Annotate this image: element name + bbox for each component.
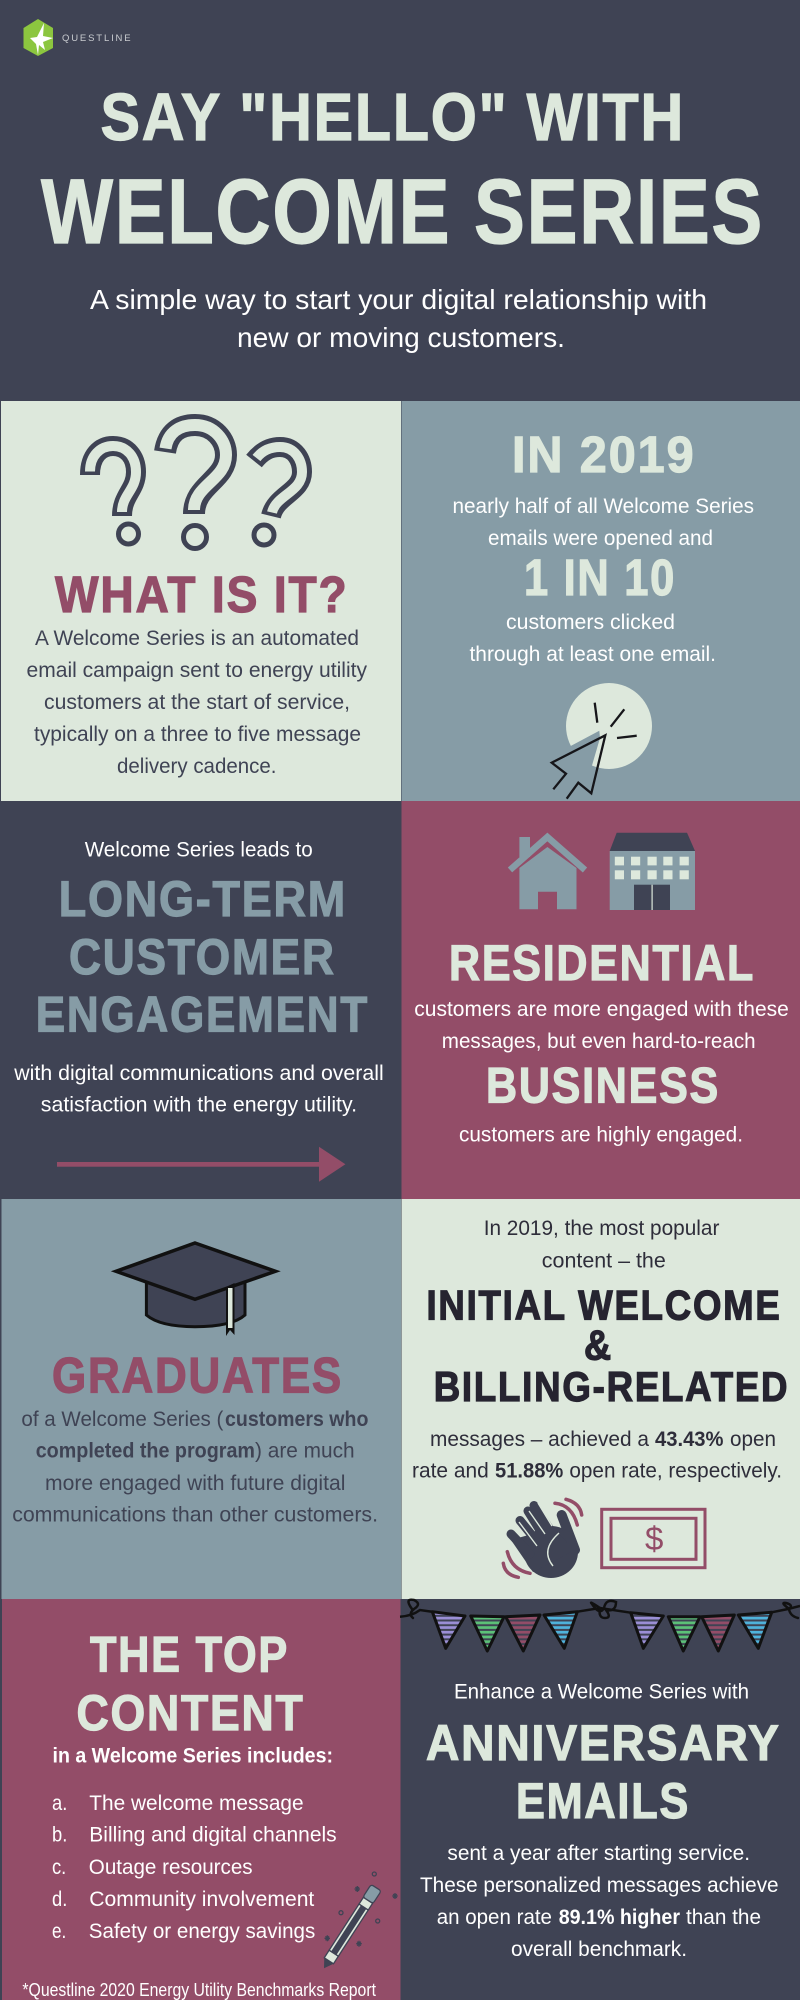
title bbox=[41, 80, 764, 263]
text: residential customers bbox=[414, 997, 789, 1053]
text: intro: Welcome Series leads to bbox=[85, 838, 313, 862]
subtitle: A simple way to start your digital relationship with bbox=[90, 284, 707, 315]
text: residential customers: customers are more engaged with these bbox=[414, 997, 789, 1021]
list: top content: d. bbox=[52, 1887, 67, 1911]
text: definition: typically on a three to five message bbox=[34, 722, 361, 746]
panel: the top content bbox=[2, 1599, 401, 2000]
text: list intro: in a Welcome Series includes: bbox=[52, 1744, 333, 1768]
heading: initial welcome and billing-related bbox=[426, 1281, 789, 1410]
heading: the top content bbox=[76, 1627, 305, 1741]
heading: long-term customer engagement: CUSTOMER bbox=[69, 929, 336, 985]
heading: anniversary emails bbox=[426, 1715, 781, 1829]
icon: question marks bbox=[90, 425, 302, 548]
text: digital communications: satisfaction with the energy utility. bbox=[41, 1093, 357, 1117]
icon: dollar bill: $ bbox=[645, 1520, 663, 1557]
text: popular content intro: In 2019, the most popular bbox=[484, 1216, 719, 1240]
logo: Questline: QUESTLINE bbox=[62, 33, 131, 44]
icon: dollar bill bbox=[602, 1509, 705, 1568]
heading: long-term customer engagement bbox=[36, 871, 369, 1043]
list: top content: b. bbox=[52, 1823, 67, 1847]
list: top content bbox=[52, 1791, 337, 1943]
text: half opened: nearly half of all Welcome Series bbox=[452, 494, 754, 518]
text: definition: email campaign sent to energy utility bbox=[26, 658, 367, 682]
text: graduates description: customers who bbox=[225, 1407, 368, 1431]
text: anniversary details: overall benchmark. bbox=[511, 1937, 687, 1961]
text: graduates description: more engaged with future digital bbox=[45, 1471, 345, 1495]
heading: long-term customer engagement: LONG-TERM bbox=[59, 871, 347, 927]
text: digital communications bbox=[13, 1061, 384, 1117]
text: anniversary details: sent a year after starting service. bbox=[447, 1841, 750, 1865]
subtitle: new or moving customers. bbox=[237, 322, 565, 353]
text: enhance intro: Enhance a Welcome Series with bbox=[454, 1680, 749, 1704]
list: top content: The welcome message bbox=[89, 1791, 304, 1815]
list: top content: Community involvement bbox=[89, 1887, 314, 1911]
subtitle bbox=[90, 284, 707, 353]
list: top content: a. bbox=[52, 1791, 67, 1815]
text: half opened: emails were opened and bbox=[488, 526, 713, 550]
text: definition: customers at the start of service, bbox=[44, 690, 350, 714]
list: top content: Outage resources bbox=[89, 1855, 253, 1879]
text: popular content intro: content – the bbox=[542, 1248, 666, 1272]
panel: in 2019 bbox=[402, 401, 800, 801]
panel: popular content bbox=[402, 1199, 800, 1599]
text: digital communications: with digital communications and overall bbox=[13, 1061, 384, 1085]
icon: waving hand bbox=[503, 1499, 582, 1578]
text: open rates: 51.88% bbox=[495, 1459, 563, 1483]
icon: house bbox=[510, 837, 585, 909]
text: anniversary details: than the bbox=[686, 1905, 761, 1929]
text: definition bbox=[26, 626, 367, 778]
text: open rates bbox=[412, 1427, 782, 1483]
text: half opened bbox=[452, 494, 754, 550]
heading: long-term customer engagement: ENGAGEMENT bbox=[36, 987, 369, 1043]
panel: anniversary emails bbox=[400, 1599, 800, 2000]
text: open rates: open bbox=[730, 1427, 776, 1451]
text: graduates description: communications than other customers. bbox=[12, 1503, 378, 1527]
heading: initial welcome and billing-related: & bbox=[584, 1321, 613, 1368]
heading: what is it: WHAT IS IT? bbox=[55, 566, 348, 623]
heading: business: BUSINESS bbox=[486, 1058, 720, 1114]
text: graduates description: ) are much bbox=[255, 1439, 355, 1463]
text: definition: delivery cadence. bbox=[117, 754, 276, 778]
list: top content: e. bbox=[52, 1919, 66, 1943]
text: customers clicked: through at least one email. bbox=[470, 642, 716, 666]
text: open rates: messages – achieved a bbox=[430, 1427, 649, 1451]
panel: what is it bbox=[1, 401, 401, 801]
heading: graduates: GRADUATES bbox=[52, 1347, 343, 1403]
text: graduates description: completed the program bbox=[36, 1439, 255, 1463]
list: top content: c. bbox=[52, 1855, 66, 1879]
header panel bbox=[0, 0, 800, 401]
footnote: *Questline 2020 Energy Utility Benchmarks Report bbox=[22, 1980, 376, 2000]
text: popular content intro bbox=[484, 1216, 719, 1272]
list: top content: Billing and digital channels bbox=[89, 1823, 337, 1847]
icon: pencil bbox=[319, 1872, 398, 1972]
text: anniversary details bbox=[420, 1841, 779, 1961]
panel: residential and business bbox=[402, 801, 800, 1199]
text: customers clicked: customers clicked bbox=[506, 610, 675, 634]
list: top content: Safety or energy savings bbox=[89, 1919, 315, 1943]
text: definition: A Welcome Series is an automated bbox=[35, 626, 359, 650]
icon: click cursor bbox=[552, 683, 652, 799]
text: customers clicked bbox=[470, 610, 716, 666]
heading: 1 in 10: 1 IN 10 bbox=[524, 549, 676, 606]
text: residential customers: messages, but even hard-to-reach bbox=[442, 1029, 756, 1053]
panel: long-term engagement bbox=[0, 801, 402, 1199]
panel: graduates bbox=[2, 1199, 401, 1599]
heading: anniversary emails: EMAILS bbox=[516, 1773, 690, 1829]
icon: bunting bbox=[400, 1600, 800, 1651]
text: open rates: rate and bbox=[412, 1459, 489, 1483]
text: anniversary details: an open rate bbox=[437, 1905, 552, 1929]
text: business customers: customers are highly engaged. bbox=[459, 1123, 743, 1147]
heading: the top content: THE TOP bbox=[90, 1627, 289, 1683]
heading: anniversary emails: ANNIVERSARY bbox=[426, 1715, 781, 1771]
heading: in 2019: IN 2019 bbox=[512, 426, 696, 483]
arrow bbox=[57, 1147, 345, 1182]
text: open rates: open rate, respectively. bbox=[569, 1459, 782, 1483]
text: open rates: 43.43% bbox=[655, 1427, 724, 1451]
icon: graduation cap bbox=[116, 1243, 276, 1336]
heading: the top content: CONTENT bbox=[76, 1685, 305, 1741]
title: SAY "HELLO" WITH bbox=[100, 80, 685, 155]
text: anniversary details: These personalized messages achieve bbox=[420, 1873, 779, 1897]
icon: office building bbox=[610, 833, 695, 910]
text: graduates description bbox=[12, 1407, 378, 1527]
logo: Questline bbox=[24, 19, 131, 56]
text: graduates description: of a Welcome Series ( bbox=[21, 1407, 224, 1431]
text: anniversary details: 89.1% higher bbox=[559, 1905, 681, 1929]
heading: residential: RESIDENTIAL bbox=[449, 935, 755, 991]
